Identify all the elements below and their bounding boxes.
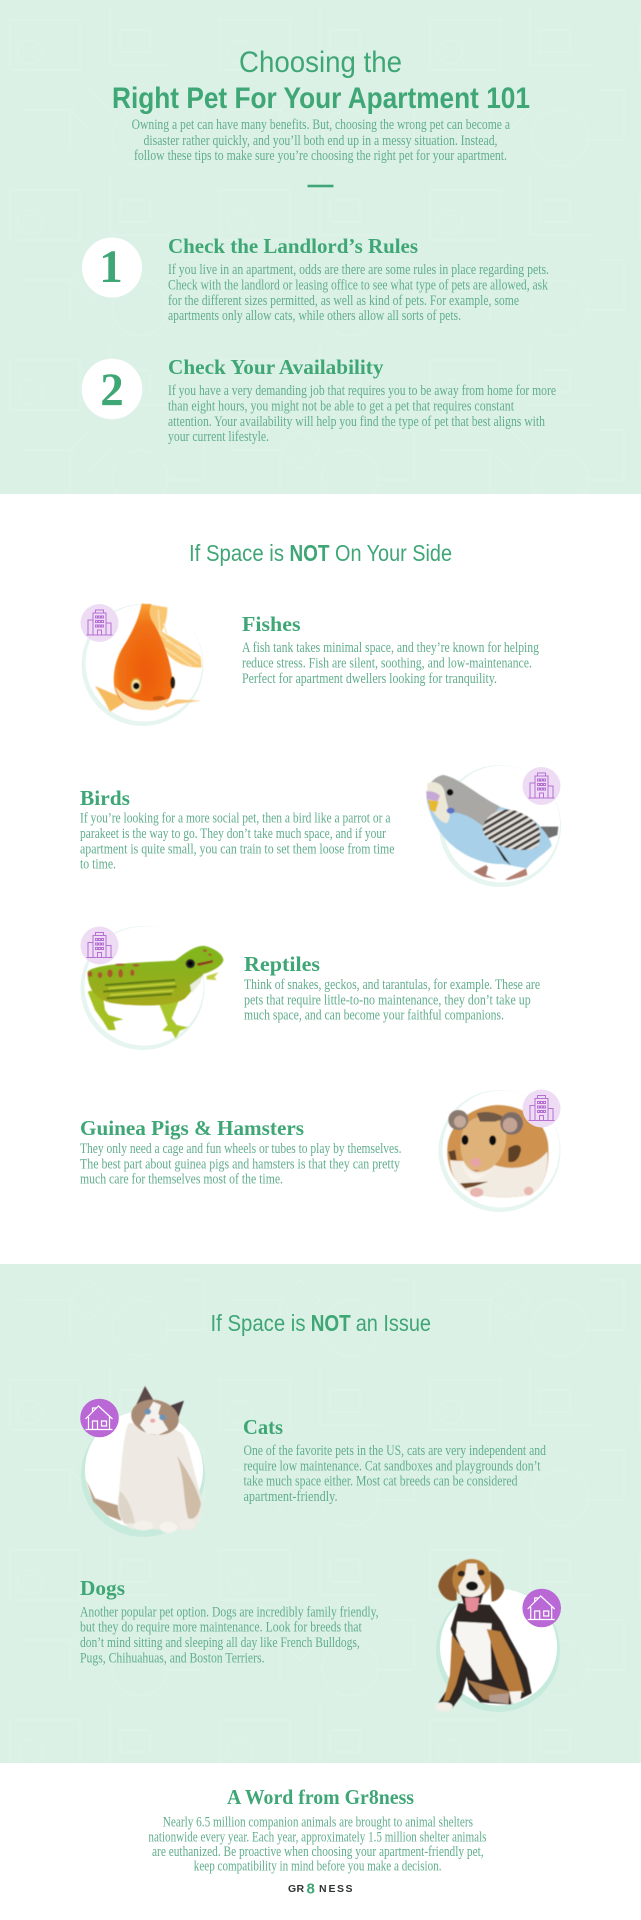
footer: a word from gr8ness <box>148 1785 487 1874</box>
intro text: disaster rather quickly, and you’ll both end up in a messy situation. Instead, <box>144 133 498 149</box>
text: guinea pigs and hamsters: They only need a cage and fun wheels or tubes to play by themselves. <box>80 1141 402 1157</box>
logo: gr8ness: 8 <box>307 1880 315 1898</box>
logo: gr8ness: GR <box>288 1883 304 1895</box>
step 1: Check the Landlord’s Rules <box>168 234 418 258</box>
pet: fishes <box>80 603 539 726</box>
step 2: your current lifestyle. <box>168 429 269 445</box>
step 1: 1 <box>99 241 123 293</box>
footer: a word from gr8ness: are euthanized. Be proactive when choosing your apartment-friendly pet, <box>152 1844 484 1860</box>
step 2: than eight hours, you might not be able to get a pet that requires constant <box>168 398 514 414</box>
text: dogs: don’t mind sitting and sleeping all day like French Bulldogs, <box>80 1635 360 1651</box>
text: birds: Birds <box>80 786 130 810</box>
pet: cats <box>80 1386 546 1537</box>
heading: space is not an issue: NOT <box>311 1310 351 1336</box>
panel: space is not an issue background <box>0 1264 641 1763</box>
step 1 <box>82 234 549 324</box>
heading: space is not on your side <box>189 540 452 566</box>
photo: cat <box>86 1386 202 1533</box>
text: cats: One of the favorite pets in the US, cats are very independent and <box>244 1443 546 1459</box>
text: birds: apartment is quite small, you can train to set them loose from time <box>80 841 394 857</box>
text: guinea pigs and hamsters: Guinea Pigs & Hamsters <box>80 1116 304 1140</box>
photo: goldfish <box>95 603 202 712</box>
step 2: Check Your Availability <box>168 355 384 379</box>
text: reptiles: pets that require little-to-no maintenance, they don’t take up <box>244 992 531 1008</box>
pet: guinea pigs and hamsters <box>80 1090 560 1212</box>
text: fishes: Perfect for apartment dwellers looking for tranquility. <box>242 671 497 687</box>
icon: building <box>522 1090 560 1128</box>
text: reptiles: much space, and can become your faithful companions. <box>244 1008 504 1024</box>
heading: space is not an issue: If Space is <box>210 1310 306 1336</box>
title: Choosing the <box>239 46 402 79</box>
text: dogs: Dogs <box>80 1576 125 1600</box>
text: cats: take much space either. Most cat breeds can be considered <box>244 1474 518 1490</box>
step 1: apartments only allow cats, while others allow all sorts of pets. <box>168 308 461 324</box>
text: cats: apartment-friendly. <box>244 1489 338 1505</box>
heading: space is not on your side: On Your Side <box>335 540 452 566</box>
footer: a word from gr8ness: nationwide every year. Each year, approximately 1.5 million shelter animals <box>148 1829 487 1845</box>
pet: reptiles <box>80 926 540 1050</box>
text: guinea pigs and hamsters: much care for themselves most of the time. <box>80 1172 283 1188</box>
text: dogs <box>80 1576 379 1666</box>
text: guinea pigs and hamsters <box>80 1116 402 1188</box>
icon: house <box>80 1399 119 1437</box>
title <box>112 46 530 115</box>
text: cats: Cats <box>243 1415 283 1439</box>
step 2: If you have a very demanding job that requires you to be away from home for more <box>168 383 556 399</box>
title: Right Pet For Your Apartment 101 <box>112 82 530 115</box>
heading: space is not on your side: If Space is <box>189 540 284 566</box>
intro text: Owning a pet can have many benefits. But, choosing the wrong pet can become a <box>132 117 511 133</box>
text: reptiles: Reptiles <box>244 952 320 976</box>
photo: hamster <box>447 1105 548 1197</box>
step 1: for the different sizes permitted, as well as kind of pets. For example, some <box>168 293 519 309</box>
step 1: Check with the landlord or leasing office to see what type of pets are allowed, ask <box>168 278 549 294</box>
text: reptiles: Think of snakes, geckos, and tarantulas, for example. These are <box>244 977 540 993</box>
heading: space is not an issue <box>210 1310 431 1336</box>
text: cats: require low maintenance. Cat sandboxes and playgrounds don’t <box>244 1458 541 1474</box>
text: dogs: but they do require more maintenance. Look for breeds that <box>80 1620 362 1636</box>
text: dogs: Another popular pet option. Dogs are incredibly family friendly, <box>80 1604 379 1620</box>
icon: building <box>80 926 118 964</box>
logo: gr8ness: NESS <box>319 1883 353 1895</box>
step 2: attention. Your availability will help you find the type of pet that best aligns with <box>168 414 545 430</box>
step 2 <box>82 355 556 445</box>
text: dogs: Pugs, Chihuahuas, and Boston Terriers. <box>80 1650 264 1666</box>
step 1: If you live in an apartment, odds are there are some rules in place regarding pets. <box>168 262 549 278</box>
text: birds: If you’re looking for a more social pet, then a bird like a parrot or a <box>80 811 391 827</box>
text: birds: to time. <box>80 857 116 873</box>
step 2: 2 <box>100 364 124 416</box>
text: fishes: A fish tank takes minimal space, and they’re known for helping <box>242 640 539 656</box>
icon: building <box>522 767 560 805</box>
text: fishes <box>242 612 539 687</box>
photo: parakeet <box>426 775 558 880</box>
pet: birds <box>80 765 561 887</box>
text: reptiles <box>244 952 540 1024</box>
panel: intro background <box>0 0 641 494</box>
photo: dog <box>435 1559 532 1711</box>
text: cats <box>243 1415 546 1505</box>
text: guinea pigs and hamsters: The best part about guinea pigs and hamsters is that they can pretty <box>80 1156 401 1172</box>
text: fishes: Fishes <box>242 612 300 636</box>
footer: a word from gr8ness: keep compatibility in mind before you make a decision. <box>194 1858 442 1874</box>
footer: a word from gr8ness: Nearly 6.5 million companion animals are brought to animal shelters <box>163 1815 473 1831</box>
heading: space is not on your side: NOT <box>290 540 330 566</box>
heading: space is not an issue: an Issue <box>356 1310 431 1336</box>
icon: house <box>522 1589 561 1627</box>
footer: a word from gr8ness: A Word from Gr8ness <box>227 1785 414 1809</box>
photo: gecko <box>88 946 223 1038</box>
text: fishes: reduce stress. Fish are silent, soothing, and low-maintenance. <box>242 656 532 672</box>
logo: gr8ness <box>288 1880 353 1898</box>
text: birds: parakeet is the way to go. They don’t take much space, and if your <box>80 826 386 842</box>
intro text: follow these tips to make sure you’re choosing the right pet for your apartment. <box>134 148 507 164</box>
text: birds <box>80 786 394 873</box>
intro text <box>132 117 511 164</box>
icon: building <box>80 604 118 642</box>
pet: dogs <box>80 1559 561 1712</box>
